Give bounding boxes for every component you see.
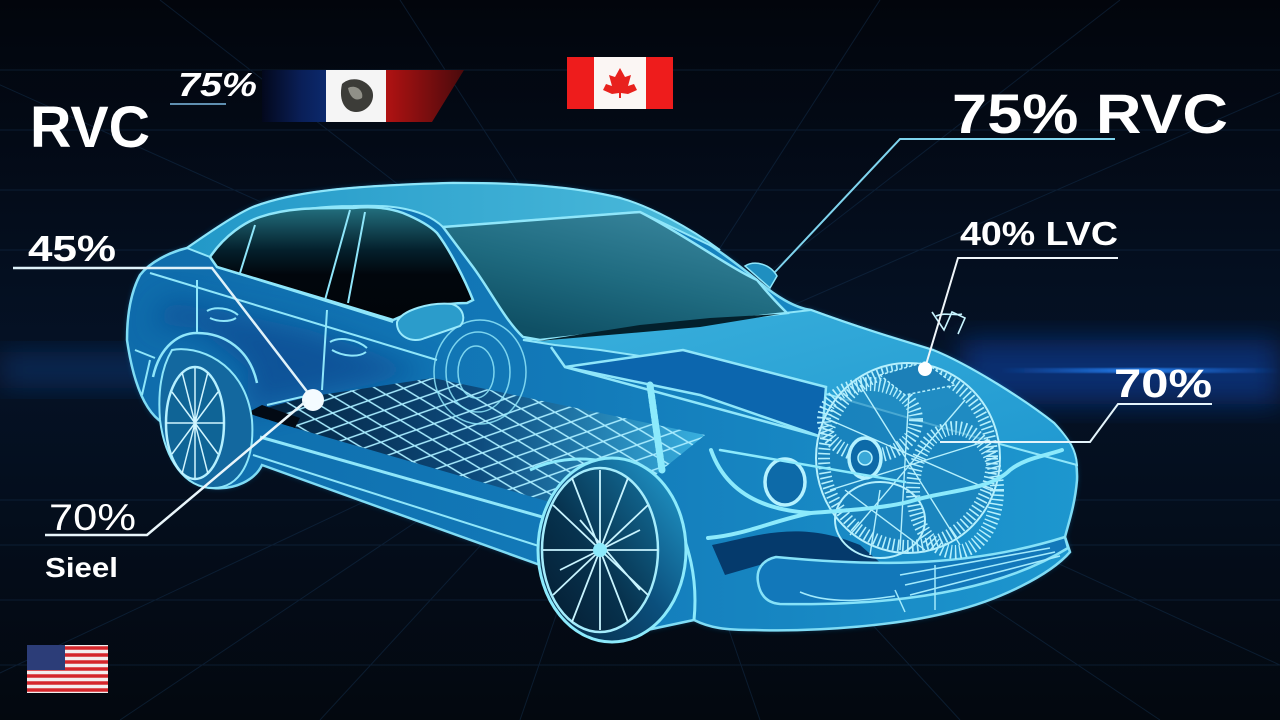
windshield [443, 212, 787, 340]
side mirror [397, 304, 463, 340]
callout: 45% [13, 228, 324, 411]
bright cables [650, 385, 1062, 538]
bumper pill [758, 537, 1068, 604]
callout: 70% Steel: 70% [49, 497, 136, 538]
roof [187, 183, 720, 257]
hood panel [523, 310, 1077, 465]
callout: 40% LVC: 40% LVC [960, 215, 1118, 252]
callout: 45%: 45% [28, 228, 116, 269]
flag: Mexico [262, 70, 464, 122]
callout: 40% LVC [918, 215, 1118, 376]
body lines [135, 267, 822, 437]
horizon glow [0, 340, 1280, 404]
headlights [765, 438, 881, 505]
front lower intake [712, 531, 900, 580]
lower sills [253, 395, 553, 548]
hood dark creases [565, 350, 826, 437]
flag: USA [27, 645, 108, 693]
inner wheel ghost [434, 320, 526, 424]
small cowl bump [745, 263, 777, 288]
car: transparent wireframe sedan [127, 183, 1077, 642]
flag: Canada [567, 57, 673, 109]
car outer glow [127, 183, 1077, 640]
callout: 75% RVC [775, 82, 1228, 272]
car body [127, 183, 1077, 640]
engine [816, 362, 1000, 558]
grille [800, 548, 1060, 612]
callout: RVC: RVC [30, 95, 150, 160]
callout: 70% Steel: Sieel [45, 552, 118, 583]
rear wheel [153, 333, 257, 488]
floor tray [252, 378, 705, 502]
callout: 75% RVC: 75% RVC [952, 82, 1228, 145]
callout: 70% right: 70% [1114, 362, 1212, 406]
side window [210, 207, 473, 320]
front wheel [530, 458, 695, 642]
dark door panels [150, 300, 430, 412]
wiper shadow [538, 314, 780, 341]
callout: 70% Steel [45, 402, 305, 583]
wiring squiggle [932, 312, 965, 334]
window pillars [240, 210, 365, 303]
callout: 75% with line: 75% [178, 66, 257, 103]
callout: 70% right [940, 362, 1212, 442]
